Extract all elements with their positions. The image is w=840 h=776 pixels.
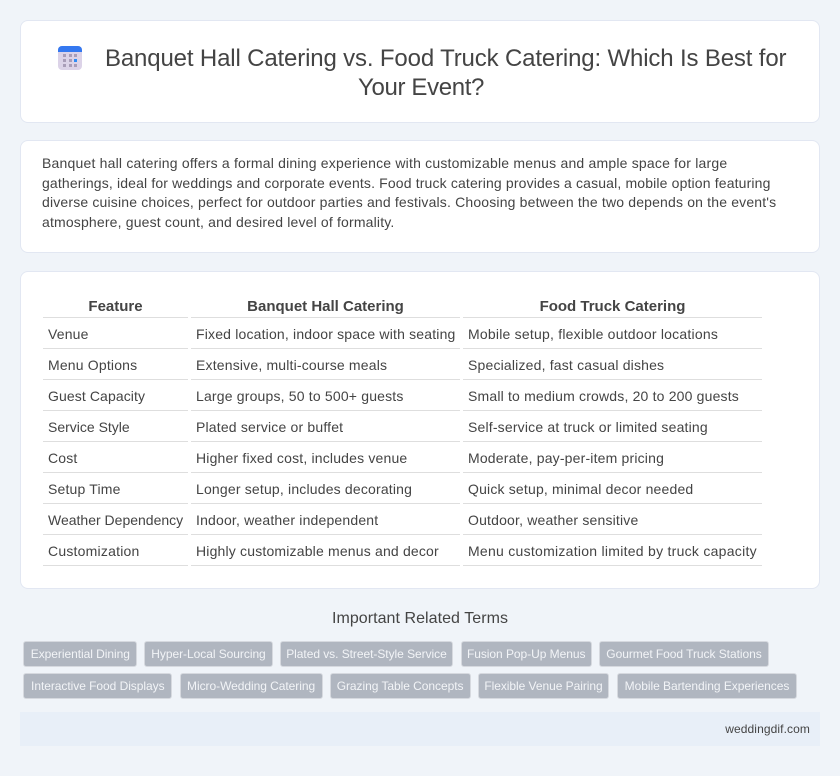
tag: Fusion Pop-Up Menus: [467, 647, 585, 661]
panel: title card: [20, 20, 820, 123]
tag: [617, 673, 797, 698]
row: customization: [43, 543, 762, 566]
row: service style: Self-service at truck or limited seating: [468, 419, 708, 435]
related terms tags: [23, 641, 797, 699]
row: service style: Plated service or buffet: [196, 419, 343, 435]
tag: Interactive Food Displays: [31, 679, 165, 693]
row: setup time: [43, 481, 762, 504]
row: cost: Higher fixed cost, includes venue: [196, 450, 407, 466]
row: cost: Moderate, pay-per-item pricing: [468, 450, 664, 466]
tag: Grazing Table Concepts: [337, 679, 463, 693]
row: venue: Venue: [48, 326, 89, 342]
row: setup time: Setup Time: [48, 481, 121, 497]
tag: [330, 673, 471, 698]
row: customization: Highly customizable menus and decor: [196, 543, 439, 559]
tag: [280, 641, 453, 666]
footer source text: weddingdif.com: [725, 722, 810, 736]
title: Banquet Hall Catering vs. Food Truck Catering: Which Is Best for: [105, 45, 786, 72]
tag: Gourmet Food Truck Stations: [606, 647, 762, 661]
row: service style: [43, 419, 762, 442]
tag: [599, 641, 769, 666]
table header row: Food Truck Catering: [540, 298, 685, 315]
tag: Hyper-Local Sourcing: [151, 647, 266, 661]
tag: [23, 641, 137, 666]
row: guest capacity: Small to medium crowds, 20 to 200 guests: [468, 388, 739, 404]
row: menu options: Menu Options: [48, 357, 137, 373]
intro paragraph: gatherings, ideal for weddings and corporate events. Food truck catering provides a casual, mobile option featuring: [42, 175, 771, 191]
row: cost: Cost: [48, 450, 78, 466]
tag: [461, 641, 592, 666]
row: guest capacity: Large groups, 50 to 500+ guests: [196, 388, 404, 404]
icon: calendar: [58, 46, 82, 70]
row: venue: Fixed location, indoor space with seating: [196, 326, 456, 342]
tag: [478, 673, 609, 698]
panel: comparison table: [20, 271, 820, 589]
intro paragraph: atmosphere, guest count, and desired level of formality.: [42, 214, 394, 230]
row: menu options: Specialized, fast casual dishes: [468, 357, 664, 373]
tag: [180, 673, 323, 698]
row: customization: Menu customization limited by truck capacity: [468, 543, 757, 559]
row: venue: [43, 326, 762, 349]
row: customization: Customization: [48, 543, 140, 559]
row: weather dependency: Weather Dependency: [48, 512, 183, 528]
row: setup time: Quick setup, minimal decor needed: [468, 481, 693, 497]
tag: [144, 641, 273, 666]
table header row: Feature: [88, 298, 143, 315]
intro paragraph: [42, 155, 776, 230]
row: guest capacity: Guest Capacity: [48, 388, 145, 404]
intro paragraph: Banquet hall catering offers a formal dining experience with customizable menus and ample space for large: [42, 155, 727, 171]
table header row: Banquet Hall Catering: [247, 298, 404, 315]
row: venue: Mobile setup, flexible outdoor locations: [468, 326, 718, 342]
row: menu options: [43, 357, 762, 380]
row: setup time: Longer setup, includes decorating: [196, 481, 412, 497]
title: Your Event?: [358, 74, 484, 101]
table header row: [43, 298, 762, 318]
row: guest capacity: [43, 388, 762, 411]
tag: Mobile Bartending Experiences: [625, 679, 789, 693]
panel: intro text: [20, 140, 820, 253]
row: weather dependency: [43, 512, 762, 535]
comparison table: [43, 298, 762, 566]
row: weather dependency: Indoor, weather independent: [196, 512, 378, 528]
tag: [23, 673, 172, 698]
tag: Experiential Dining: [31, 647, 130, 661]
tag: Micro-Wedding Catering: [187, 679, 315, 693]
title: [105, 45, 786, 101]
related terms heading: Important Related Terms: [332, 610, 508, 627]
tag: Flexible Venue Pairing: [484, 679, 603, 693]
row: cost: [43, 450, 762, 473]
row: service style: Service Style: [48, 419, 130, 435]
row: weather dependency: Outdoor, weather sensitive: [468, 512, 638, 528]
row: menu options: Extensive, multi-course meals: [196, 357, 387, 373]
tag: Plated vs. Street-Style Service: [286, 647, 447, 661]
intro paragraph: diverse cuisine choices, perfect for outdoor parties and festivals. Choosing between the two depends on the event's: [42, 194, 776, 210]
footer bar: [20, 712, 820, 746]
